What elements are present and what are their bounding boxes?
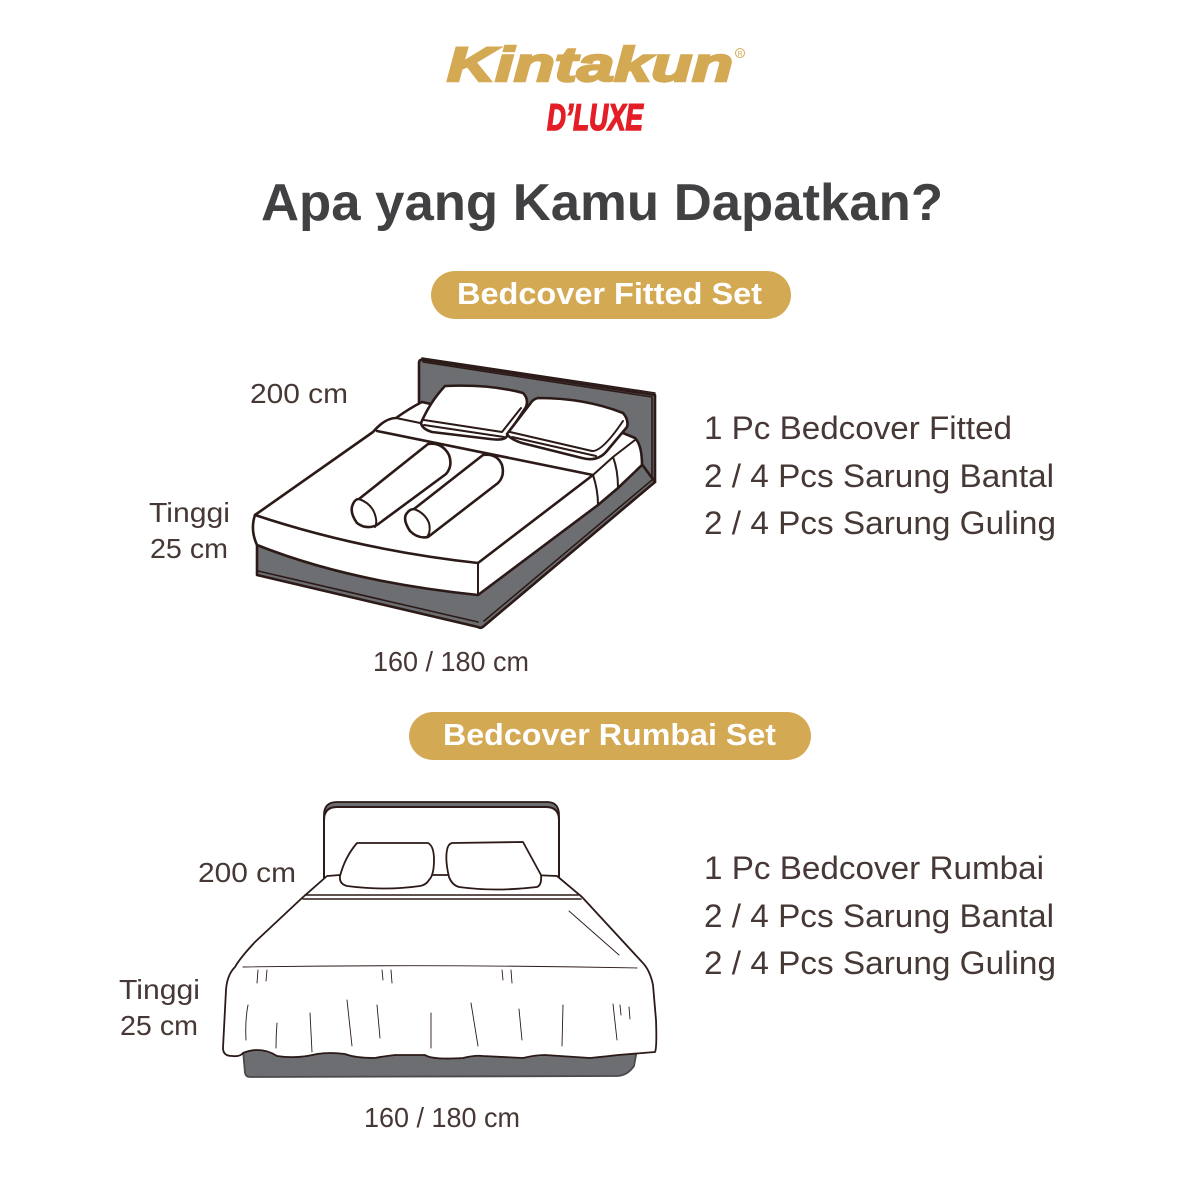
bolster left <box>352 444 450 527</box>
illustration: fitted bed <box>253 358 655 628</box>
dimension: width fitted: 160 / 180 cm <box>373 646 529 677</box>
logo: Kintakun <box>447 39 744 92</box>
badge: Bedcover Rumbai Set: Bedcover Rumbai Set <box>443 717 776 752</box>
dimension: height fitted <box>149 497 230 564</box>
bed base <box>257 463 655 628</box>
headboard <box>419 360 655 482</box>
dimension: height fitted: Tinggi <box>149 497 230 528</box>
list: fitted set contents: 2 / 4 Pcs Sarung Guling <box>704 505 1056 541</box>
pillow left <box>340 843 434 888</box>
dimension: 200 cm rumbai: 200 cm <box>198 857 296 888</box>
list: rumbai set contents: 2 / 4 Pcs Sarung Bantal <box>704 898 1054 934</box>
mattress <box>253 402 642 595</box>
bedcover skirt <box>223 875 656 1059</box>
list: rumbai set contents: 2 / 4 Pcs Sarung Guling <box>704 945 1056 981</box>
title: Apa yang Kamu Dapatkan? <box>261 174 943 232</box>
dimension: height rumbai <box>119 974 200 1041</box>
list: fitted set contents: 1 Pc Bedcover Fitted <box>704 410 1012 446</box>
pillow right <box>507 398 628 459</box>
bolster right <box>405 455 503 537</box>
dimension: 200 cm fitted: 200 cm <box>250 378 348 409</box>
fold lines <box>243 911 637 1052</box>
pillow right <box>446 842 541 890</box>
dimension: height rumbai: 25 cm <box>120 1010 198 1041</box>
pillow left <box>421 386 527 440</box>
bed base <box>243 1050 637 1077</box>
dimension: height fitted: 25 cm <box>150 533 228 564</box>
badge: Bedcover Fitted Set: Bedcover Fitted Set <box>457 276 762 311</box>
badge: Bedcover Fitted Set <box>431 271 791 319</box>
list: fitted set contents: 2 / 4 Pcs Sarung Bantal <box>704 458 1054 494</box>
list: fitted set contents <box>704 410 1056 541</box>
illustration: rumbai bed <box>223 802 656 1077</box>
list: rumbai set contents: 1 Pc Bedcover Rumbai <box>704 850 1044 886</box>
dimension: width rumbai: 160 / 180 cm <box>364 1102 520 1133</box>
logo: Kintakun: R <box>738 51 743 58</box>
headboard <box>324 802 559 880</box>
logo: D'LUXE: D’LUXE <box>547 97 644 138</box>
dimension: height rumbai: Tinggi <box>119 974 200 1005</box>
logo: Kintakun: Kintakun <box>447 39 733 92</box>
badge: Bedcover Rumbai Set <box>409 712 811 760</box>
list: rumbai set contents <box>704 850 1056 981</box>
bed sheet fold bands <box>303 895 581 899</box>
